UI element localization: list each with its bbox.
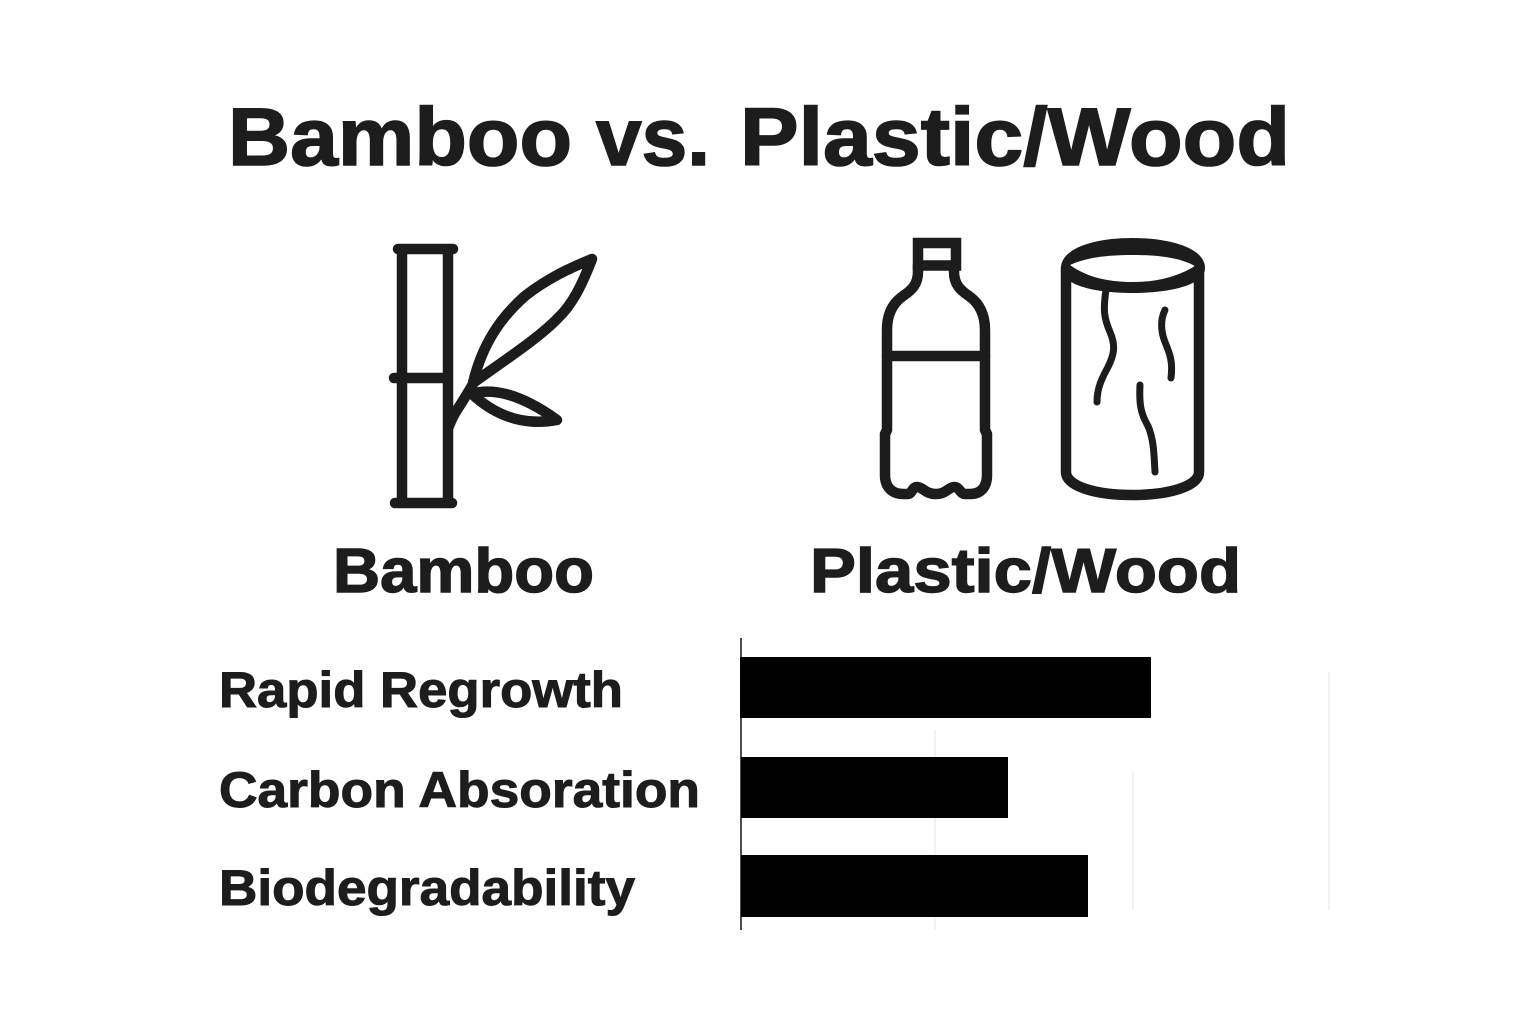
row: biodegradability	[219, 855, 1088, 917]
row: rapid regrowth	[219, 657, 1151, 718]
icon: plastic bottle	[885, 243, 987, 494]
axis	[740, 638, 742, 930]
title: Plastic/Wood	[740, 92, 1290, 183]
label: bamboo: Bamboo	[333, 537, 594, 606]
title: Bamboo	[228, 92, 572, 183]
title: vs.	[596, 92, 710, 183]
label: plastic/wood: Plastic/Wood	[810, 537, 1241, 606]
row: rapid regrowth: Rapid Regrowth	[219, 662, 623, 718]
row: carbon absoration	[219, 757, 1008, 818]
title	[228, 92, 1290, 183]
row: biodegradability: Biodegradability	[219, 860, 635, 916]
icon: bamboo stalk with leaves	[394, 249, 592, 503]
row: carbon absoration: Carbon Absoration	[219, 762, 700, 818]
icon: wood log	[1061, 238, 1205, 495]
bar chart	[219, 638, 1329, 930]
